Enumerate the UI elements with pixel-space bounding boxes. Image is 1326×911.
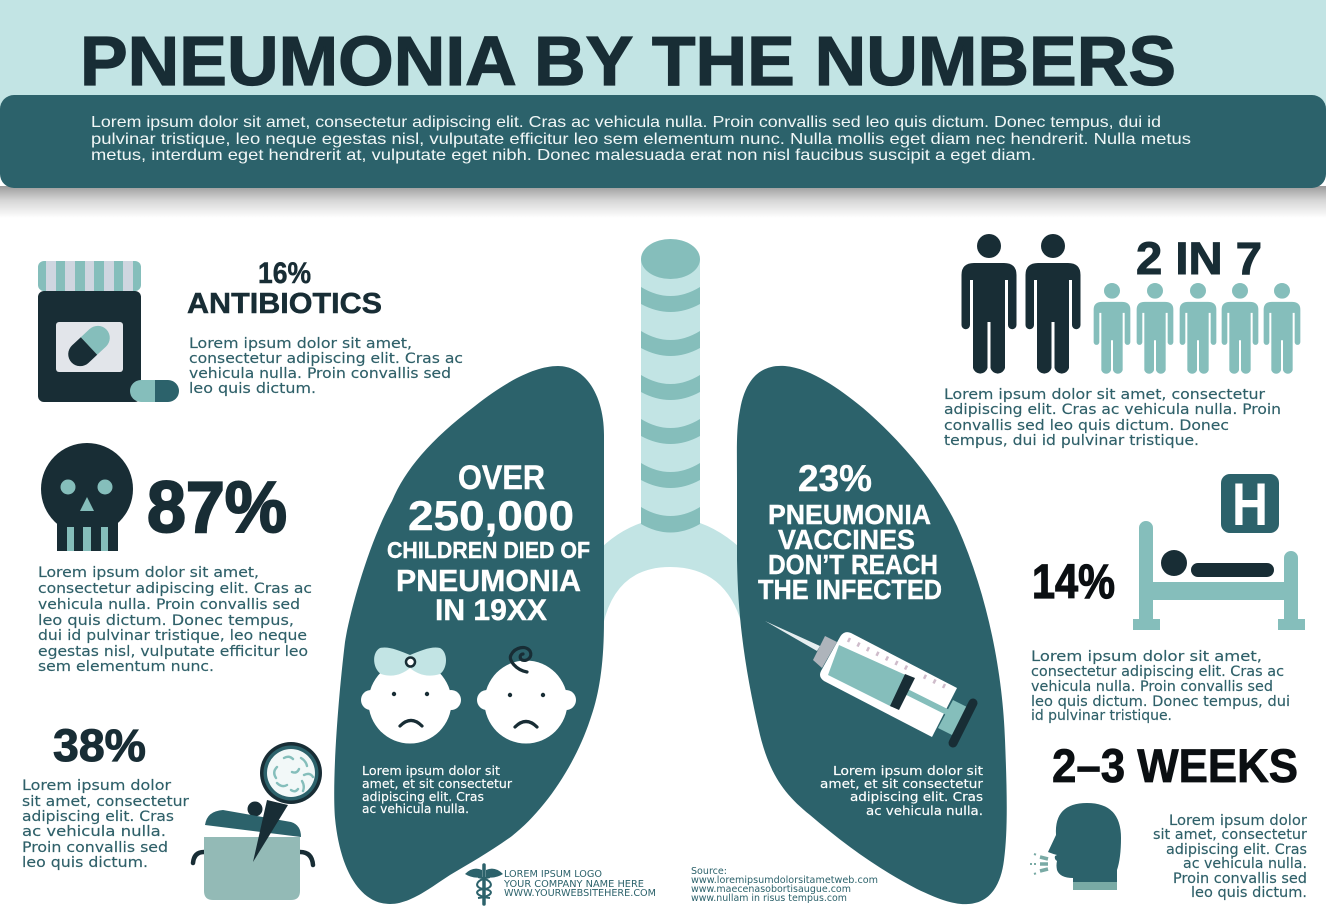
body text: Lorem ipsum dolor sit amet, (189, 336, 412, 352)
body text: adipiscing elit. Cras ac vehicula nulla. Proin (944, 402, 1281, 418)
body text: Lorem ipsum dolor (22, 778, 171, 794)
body text: leo quis dictum. (22, 855, 148, 871)
headline: 23% vaccines: PNEUMONIA (768, 499, 931, 530)
headline: 23% vaccines: DON’T REACH (768, 549, 938, 580)
intro panel: pulvinar tristique, leo neque egestas nisl, vulputate efficitur leo sem elementum nunc. Nulla mollis eget diam nec hendrerit. Nulla metus (91, 131, 1191, 148)
stat: 38% (22, 720, 322, 900)
icon: skull (41, 443, 133, 551)
body text: tempus, dui id pulvinar tristique. (944, 433, 1199, 449)
right lung body text: adipiscing elit. Cras (850, 789, 983, 804)
icon: two dark people (962, 234, 1080, 374)
body text: leo quis dictum. Donec tempus, (38, 613, 294, 629)
icon: five light people (1094, 283, 1300, 374)
trachea (641, 239, 700, 532)
sources: www.maecenasobortisaugue.com (691, 884, 851, 895)
left lung text (361, 459, 590, 816)
body text: vehicula nulla. Proin convallis sed (189, 366, 451, 382)
right lung body text: Lorem ipsum dolor sit (833, 763, 983, 778)
body text: vehicula nulla. Proin convallis sed (38, 597, 300, 613)
sources: Source: (691, 866, 727, 877)
heading: 16% (258, 257, 311, 290)
body text: consectetur adipiscing elit. Cras ac (189, 351, 463, 367)
icon: coughing head (1030, 803, 1121, 890)
right lung (737, 366, 1007, 904)
headline: 23% vaccines: THE INFECTED (758, 574, 942, 605)
sources (691, 866, 878, 904)
stat: 16% antibiotics (38, 257, 463, 402)
headline: 23% vaccines: 23% (798, 458, 872, 499)
stat: 87% (38, 443, 312, 675)
body text: Proin convallis sed (22, 840, 168, 856)
left lung body text (362, 763, 513, 816)
logo text: WWW.YOURWEBSITEHERE.COM (504, 888, 656, 899)
icon: patient in bed (1133, 521, 1305, 630)
body text: adipiscing elit. Cras (22, 809, 174, 825)
left lung body text: ac vehicula nulla. (362, 801, 469, 816)
headline: 23% vaccines (758, 458, 942, 605)
headline: over 250,000 children: IN 19XX (435, 594, 547, 627)
body text: vehicula nulla. Proin convallis sed (1031, 679, 1273, 695)
body text: id pulvinar tristique. (1031, 708, 1172, 724)
value: 2–3 WEEKS (1052, 739, 1298, 792)
icon: pill bottle (38, 261, 179, 402)
body text (1153, 813, 1307, 901)
headline: over 250,000 children (387, 459, 590, 627)
body text: consectetur adipiscing elit. Cras ac (1031, 664, 1284, 680)
intro panel (0, 95, 1326, 188)
heading (187, 257, 382, 320)
icon: pot with magnifier (193, 742, 322, 900)
body text: Lorem ipsum dolor sit amet, (1031, 649, 1262, 665)
headline: over 250,000 children: OVER (458, 459, 545, 497)
stat: 2 in 7 (944, 233, 1300, 449)
title: PNEUMONIA BY THE NUMBERS (80, 22, 1176, 100)
left lung (334, 366, 604, 904)
right lung body text (820, 763, 984, 818)
icon: hospital sign: H (1232, 471, 1268, 538)
value: 87% (147, 468, 287, 548)
stat: 14% (1031, 471, 1305, 724)
left lung body text: Lorem ipsum dolor sit (362, 763, 500, 778)
header (0, 0, 1326, 218)
icon: caduceus (465, 865, 503, 904)
body text: leo quis dictum. (1191, 885, 1307, 901)
sources: www.loremipsumdolorsitametweb.com (691, 875, 878, 886)
intro panel: Lorem ipsum dolor sit amet, consectetur adipiscing elit. Cras ac vehicula nulla. Proin convallis sed leo quis dictum. Donec tempus, dui id (91, 114, 1161, 131)
icon: syringe (765, 621, 973, 743)
headline: over 250,000 children: PNEUMONIA (396, 563, 581, 598)
body text: Lorem ipsum dolor (1169, 813, 1307, 829)
body text: dui id pulvinar tristique, leo neque (38, 628, 307, 644)
body text: Proin convallis sed (1173, 871, 1307, 887)
body text: ac vehicula nulla. (1183, 856, 1307, 872)
bronchi (590, 523, 752, 625)
body text (189, 336, 463, 397)
body text: Lorem ipsum dolor sit amet, (38, 565, 259, 581)
body text (38, 565, 312, 675)
body text: sem elementum nunc. (38, 659, 214, 675)
left lung body text: adipiscing elit. Cras (362, 789, 484, 804)
icon: baby girl (361, 647, 461, 744)
headline: over 250,000 children: 250,000 (408, 492, 574, 539)
company logo (465, 865, 656, 904)
intro panel: metus, interdum eget hendrerit at, vulputate eget nibh. Donec malesuada erat non nisl faucibus suscipit a eget diam. (91, 147, 1036, 164)
body text (22, 778, 189, 871)
body text: adipiscing elit. Cras (1166, 842, 1307, 858)
stat: 2-3 weeks (1030, 739, 1307, 901)
body text: consectetur adipiscing elit. Cras ac (38, 581, 312, 597)
right lung text (758, 458, 984, 818)
body text: convallis sed leo quis dictum. Donec (944, 418, 1229, 434)
right lung body text: amet, et sit consectetur (820, 776, 984, 791)
body text: leo quis dictum. Donec tempus, dui (1031, 694, 1290, 710)
icon: baby boy (477, 648, 576, 744)
body text: leo quis dictum. (189, 381, 316, 397)
body text: ac vehicula nulla. (22, 824, 166, 840)
logo text (503, 869, 656, 899)
value: 38% (53, 720, 146, 771)
logo text: YOUR COMPANY NAME HERE (503, 879, 644, 890)
headline: over 250,000 children: CHILDREN DIED OF (387, 537, 590, 563)
left lung body text: amet, et sit consectetur (362, 776, 513, 791)
body text (1031, 649, 1290, 724)
lungs diagram (334, 239, 1007, 904)
headline: 23% vaccines: VACCINES (778, 524, 915, 555)
body text: Lorem ipsum dolor sit amet, consectetur (944, 387, 1265, 403)
body text: egestas nisl, vulputate efficitur leo (38, 644, 308, 660)
value: 2 IN 7 (1136, 233, 1262, 284)
heading: ANTIBIOTICS (187, 288, 382, 320)
value: 14% (1032, 556, 1115, 609)
body text: sit amet, consectetur (22, 794, 189, 810)
sources: www.nullam in risus tempus.com (691, 893, 847, 904)
right lung body text: ac vehicula nulla. (866, 803, 983, 818)
logo text: LOREM IPSUM LOGO (504, 869, 602, 880)
body text: sit amet, consectetur (1153, 827, 1307, 843)
body text (944, 387, 1281, 449)
